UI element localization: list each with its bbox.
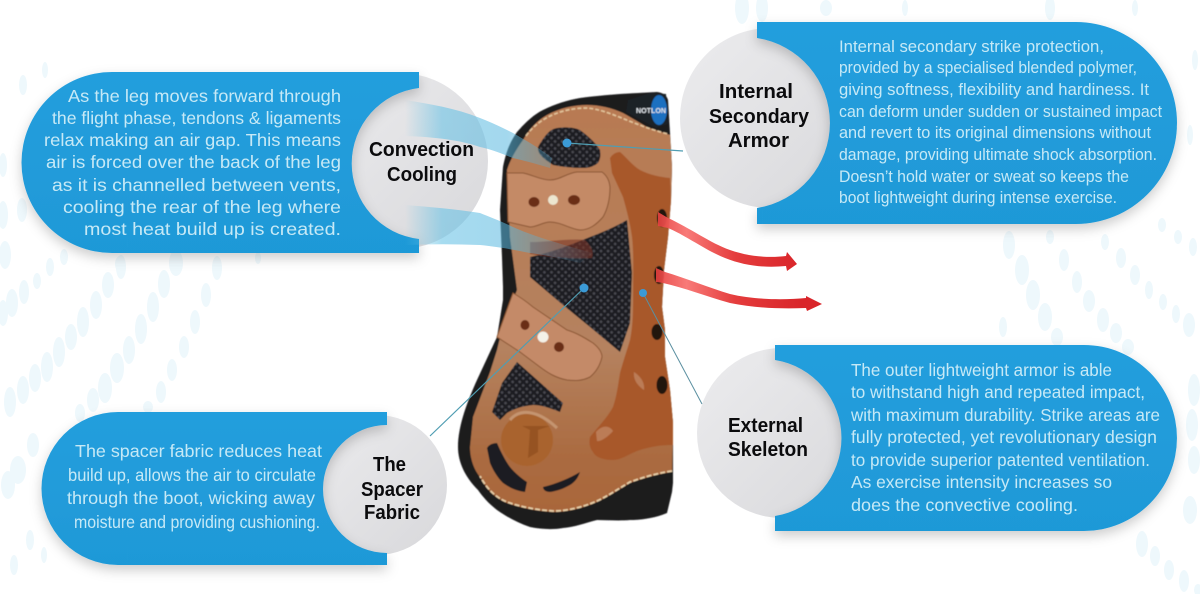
blue callout shape: [22, 72, 419, 253]
grey circle: convection cooling: [312, 73, 488, 249]
leader line: internal secondary armor: [562, 138, 683, 151]
logo circle: [501, 412, 557, 466]
body text: to withstand high and repeated impact,: [851, 382, 1145, 402]
body text: does the convective cooling.: [851, 495, 1078, 515]
blue callout shape: [757, 22, 1177, 224]
heading: Convection: [369, 139, 474, 161]
body text: Doesn’t hold water or sweat so keeps the: [839, 168, 1129, 186]
strap hole: [528, 197, 540, 207]
body text: [67, 441, 322, 532]
body text: most heat build up is created.: [84, 219, 341, 239]
heading: [361, 454, 423, 524]
rivet: [548, 195, 558, 205]
blue callout shape: [775, 345, 1177, 531]
strap hole: [520, 320, 530, 330]
heading: Fabric: [364, 502, 420, 524]
body text: Internal secondary strike protection,: [839, 38, 1104, 56]
logo letter T: [522, 426, 550, 458]
body text: provided by a specialised blended polymer,: [839, 59, 1137, 77]
boot illustration: [458, 92, 673, 529]
heading: Secondary: [709, 106, 810, 128]
body text: The spacer fabric reduces heat: [75, 441, 322, 461]
upper mesh vent: [538, 127, 600, 168]
bottom stitching: [480, 471, 672, 511]
top stitching: [526, 108, 668, 136]
red arrow: lower exhaust airflow: [656, 268, 822, 311]
body text: can deform under sudden or sustained impact: [839, 103, 1162, 121]
boot black silhouette: [458, 92, 673, 529]
heading: [369, 139, 474, 186]
panel: internal secondary armor: [680, 22, 1177, 224]
body text: and revert to its original dimensions without: [839, 124, 1151, 142]
body text: fully protected, yet revolutionary design: [851, 427, 1157, 447]
panel: external skeleton: [697, 345, 1177, 531]
body text: [850, 360, 1160, 515]
airflow shadow on middle mesh: [530, 239, 593, 258]
lower strap: [497, 293, 602, 381]
blue logo mark: [651, 95, 667, 125]
heading: Armor: [728, 130, 789, 152]
upper convection airflow band: [405, 100, 552, 168]
body text: cooling the rear of the leg where: [63, 197, 341, 217]
body text: As the leg moves forward through: [68, 86, 341, 106]
lower slot vent: [487, 443, 527, 492]
body text: through the boot, wicking away: [67, 488, 315, 508]
body text: relax making an air gap. This means: [44, 130, 341, 150]
lower slot vent: [543, 472, 580, 492]
skeleton gloss highlights: [596, 372, 644, 441]
body text: with maximum durability. Strike areas are: [850, 405, 1160, 425]
upper strap: [507, 172, 610, 230]
lower mesh vent: [492, 362, 563, 420]
grey circle: internal secondary armor: [680, 28, 860, 208]
body text: The outer lightweight armor is able: [851, 360, 1112, 380]
grey circle: the spacer fabric: [307, 415, 447, 555]
body text: damage, providing ultimate shock absorption.: [839, 146, 1157, 164]
body text: air is forced over the back of the leg: [46, 152, 341, 172]
strap hole: [568, 195, 580, 205]
heading: Cooling: [387, 164, 457, 186]
body text: giving softness, flexibility and hardiness. It: [839, 81, 1149, 99]
logo arc highlight: [510, 412, 557, 428]
marker dot: [580, 284, 588, 292]
body text: the flight phase, tendons & ligaments: [52, 108, 341, 128]
tan inner shell: [470, 105, 673, 512]
panel: convection cooling: [22, 72, 488, 253]
blue callout shape: [42, 412, 387, 565]
body text: As exercise intensity increases so: [851, 472, 1112, 492]
body text: moisture and providing cushioning.: [74, 512, 320, 532]
heading: [709, 81, 810, 152]
lower convection airflow band: [405, 205, 593, 263]
grey circle: external skeleton: [697, 348, 867, 518]
heading: Spacer: [361, 479, 423, 501]
side vent holes: [652, 209, 668, 394]
brand text: NOTLON: [636, 106, 666, 115]
heading: [728, 415, 808, 461]
marker dot: [562, 138, 572, 148]
red arrow: upper exhaust airflow: [658, 212, 797, 271]
brand badge: [626, 93, 668, 128]
heading: Skeleton: [728, 439, 808, 461]
panel: the spacer fabric: [42, 412, 447, 565]
leader line: external skeleton: [639, 289, 702, 404]
body text: as it is channelled between vents,: [52, 175, 341, 195]
body text: boot lightweight during intense exercise.: [839, 189, 1117, 207]
body text: [44, 86, 341, 239]
body text: to provide superior patented ventilation.: [851, 450, 1150, 470]
marker dot: [639, 289, 647, 297]
leader line: spacer fabric: [430, 284, 588, 436]
body text: build up, allows the air to circulate: [68, 465, 316, 485]
rivet: [538, 332, 548, 342]
middle mesh vent: [530, 220, 632, 352]
heading: Internal: [719, 81, 793, 103]
strap hole: [554, 342, 564, 352]
heading: The: [373, 454, 406, 476]
body text: [839, 38, 1162, 207]
dark orange external skeleton: [589, 152, 673, 460]
heading: External: [728, 415, 803, 437]
